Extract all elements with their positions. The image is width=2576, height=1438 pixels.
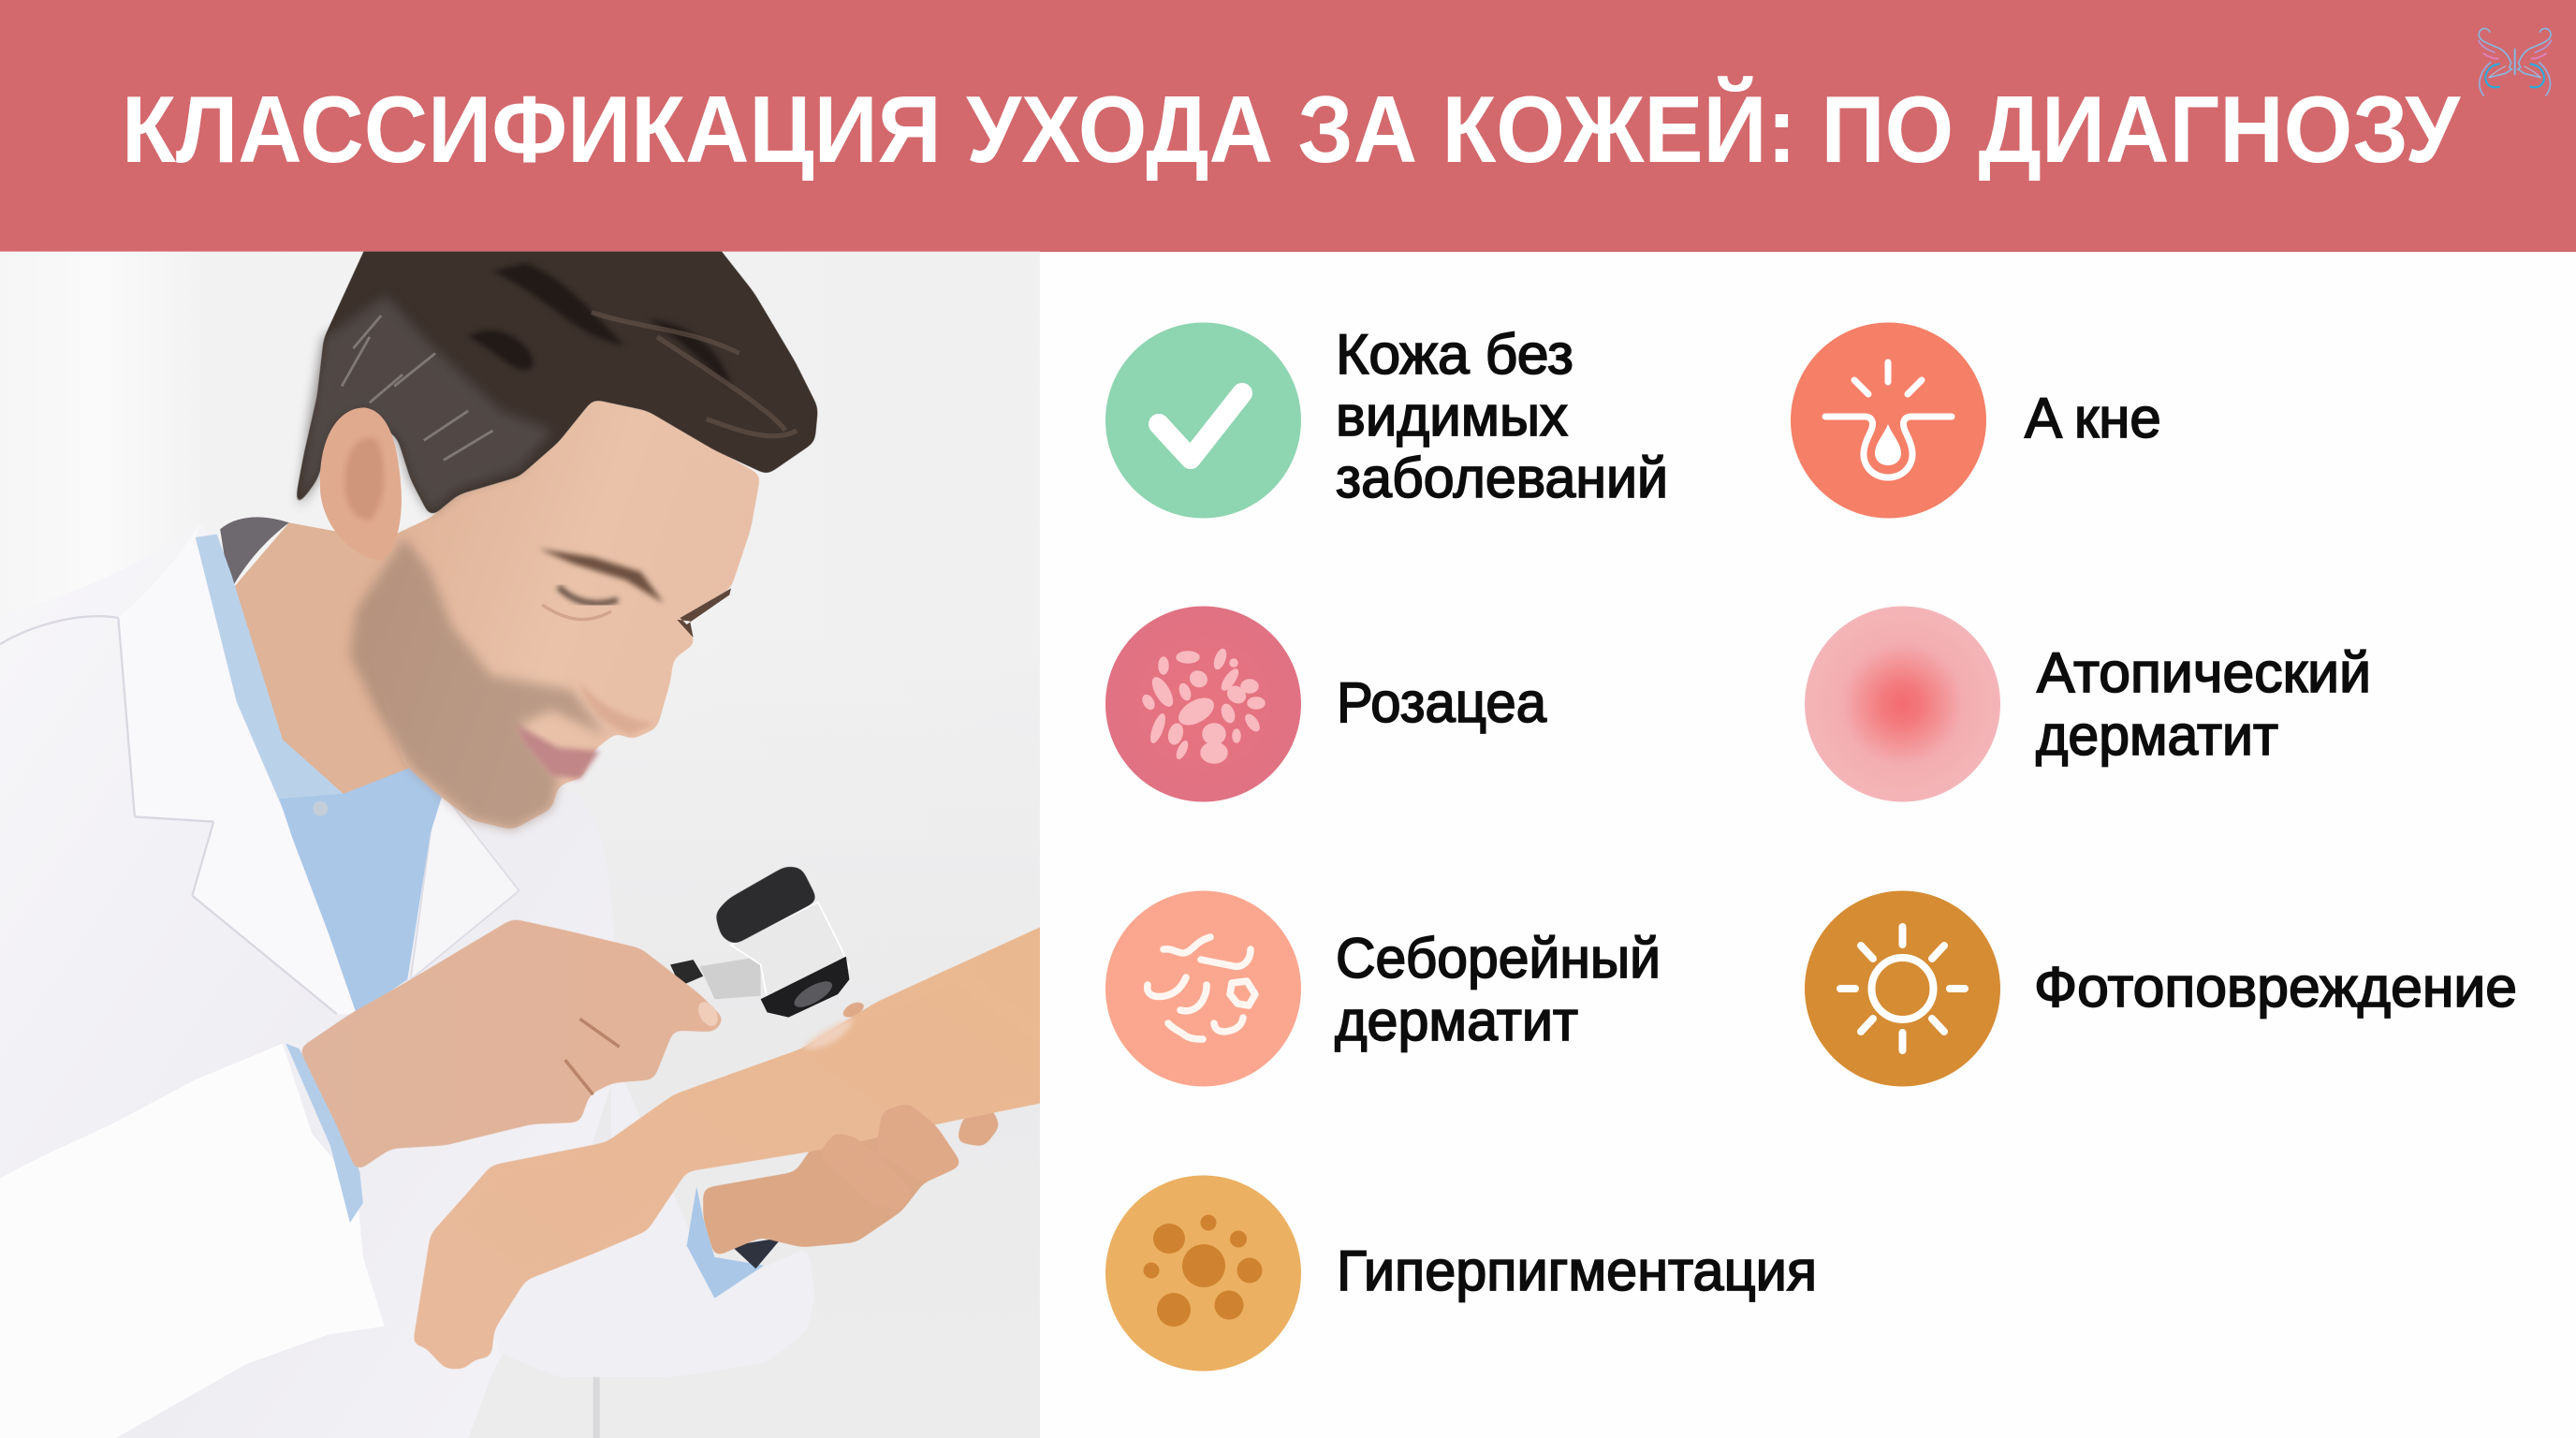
neck: [235, 522, 409, 794]
item: healthy skin: [1105, 322, 1668, 519]
icon: sun: [1805, 891, 2000, 1086]
far shirt cuff: [687, 1186, 764, 1299]
patient arm and hand: [413, 922, 1051, 1369]
coat lapels: [0, 615, 520, 1015]
nose shadow: [582, 687, 650, 734]
icon: check mark in green circle: [1105, 322, 1301, 519]
label: Себорейный: [1336, 927, 1661, 990]
dermatoscope: [670, 867, 850, 1018]
icon: butterfly logo: [2479, 28, 2551, 95]
patient far fingers: [835, 1001, 1001, 1147]
header banner: [0, 0, 2576, 252]
face: [370, 400, 761, 829]
hair: [292, 239, 818, 518]
dark inner collar: [220, 517, 289, 592]
near shirt cuff: [285, 1044, 363, 1223]
label: Розацеа: [1337, 671, 1547, 734]
item: acne: [1791, 322, 2161, 519]
icon: red inflamed spot: [1805, 607, 2000, 801]
far coat sleeve: [504, 1082, 813, 1377]
label: Кожа без: [1336, 323, 1573, 386]
label: Гиперпигментация: [1337, 1240, 1817, 1302]
label: дерматит: [1335, 990, 1578, 1052]
item: atopic dermatitis: [1805, 607, 2371, 801]
item: rosacea: [1105, 607, 1547, 801]
label: дерматит: [2036, 704, 2278, 767]
item: hyperpigmentation: [1105, 1176, 1817, 1371]
ear: [320, 407, 402, 561]
item: seborrheic dermatitis: [1105, 891, 1661, 1086]
eye near: [559, 587, 618, 604]
title: КЛАССИФИКАЦИЯ УХОДА ЗА КОЖЕЙ: ПО ДИАГНОЗУ: [122, 77, 2461, 183]
photo panel: doctor examining arm with dermatoscope: [0, 239, 1051, 1438]
stubble: [350, 537, 607, 829]
doctor head: [292, 239, 818, 829]
doctor hand holding device: [299, 918, 724, 1172]
far eyebrow and lashes: [677, 588, 731, 638]
label: видимых: [1336, 385, 1568, 448]
icon: clogged pore with drop: [1791, 322, 1986, 519]
label: заболеваний: [1336, 447, 1668, 509]
shirt: [196, 535, 446, 1014]
patient supporting hand: [703, 1125, 962, 1257]
icon: pigment spots: [1105, 1176, 1301, 1371]
label: Фотоповреждение: [2034, 956, 2517, 1019]
icon: rosacea patches: [1105, 607, 1301, 801]
item: photodamage: [1805, 891, 2517, 1086]
label: Атопический: [2037, 641, 2371, 704]
patient fingers over arm: [822, 1105, 959, 1181]
near coat sleeve: [0, 1044, 385, 1438]
icon: flakes: [1105, 891, 1301, 1086]
mouth: [516, 725, 600, 779]
eyebrow near: [539, 549, 664, 603]
label: Акне: [2025, 387, 2161, 449]
coat torso: [0, 899, 610, 1438]
